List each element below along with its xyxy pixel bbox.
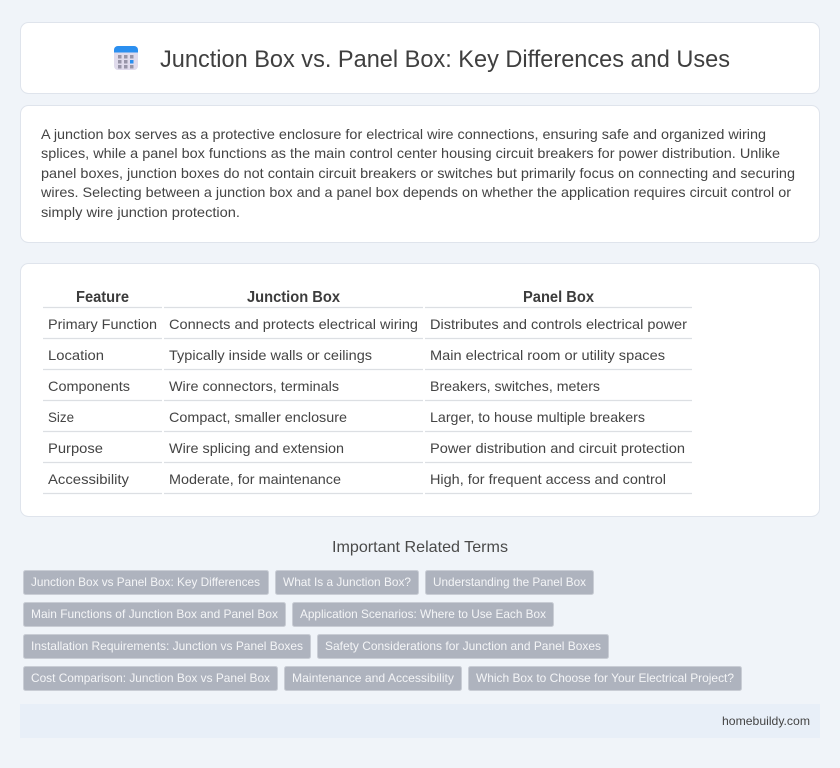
related term tags: What Is a Junction Box? [283, 575, 411, 589]
heading: important related terms: Important Related Terms [332, 539, 508, 556]
table rows: Distributes and controls electrical power [430, 316, 687, 332]
related term tags: Installation Requirements: Junction vs Panel Boxes [31, 639, 303, 653]
table rows: Breakers, switches, meters [430, 378, 600, 394]
footer [20, 704, 820, 738]
table rows: Purpose [48, 440, 103, 456]
panel: introduction text: A junction box serves as a protective enclosure for electrical wire connections, ensuring safe and organized wiring [41, 126, 766, 142]
table rows: Moderate, for maintenance [169, 471, 341, 487]
table header: Panel Box [523, 289, 594, 306]
table rows: High, for frequent access and control [430, 471, 666, 487]
panel: introduction text: splices, while a panel box functions as the main control center housing circuit breakers for power distribution. Unlike [41, 145, 780, 161]
related term tags: Application Scenarios: Where to Use Each Box [300, 607, 546, 621]
related term tags: Understanding the Panel Box [433, 575, 586, 589]
table rows: Components [48, 378, 130, 394]
related term tags: Cost Comparison: Junction Box vs Panel Box [31, 671, 270, 685]
panel: introduction text [20, 106, 820, 242]
panel: introduction text: wires. Selecting between a junction box and a panel box depends on whether the application requires circuit control or [40, 184, 791, 200]
related term tags: Safety Considerations for Junction and Panel Boxes [325, 639, 601, 653]
related term tags: Which Box to Choose for Your Electrical Project? [476, 671, 734, 685]
table rows [43, 308, 692, 494]
table rows: Wire connectors, terminals [169, 378, 339, 394]
panel: comparison table [20, 264, 820, 516]
table rows: Main electrical room or utility spaces [430, 347, 665, 363]
icon: calendar grid [114, 46, 138, 70]
table rows: Typically inside walls or ceilings [169, 347, 372, 363]
table header [76, 289, 594, 306]
table rows: Connects and protects electrical wiring [169, 316, 418, 332]
panel: introduction text: panel boxes, junction boxes do not contain circuit breakers or switches but primarily focus on connecting and securing [41, 165, 795, 181]
table rows: Location [48, 347, 104, 363]
table rows: Size [48, 409, 74, 425]
related term tags [24, 570, 742, 690]
related term tags: Main Functions of Junction Box and Panel Box [31, 607, 278, 621]
title: Junction Box vs. Panel Box: Key Differences and Uses [160, 46, 730, 73]
table rows: Compact, smaller enclosure [169, 409, 347, 425]
panel: title header [20, 22, 820, 94]
table header: Feature [76, 289, 129, 306]
panel: introduction text: simply wire junction protection. [41, 204, 240, 220]
table header: Junction Box [247, 289, 340, 306]
table rows: Accessibility [48, 471, 129, 487]
table rows: Primary Function [48, 316, 157, 332]
related term tags: Maintenance and Accessibility [292, 671, 454, 685]
table rows: Power distribution and circuit protection [430, 440, 685, 456]
footer: homebuildy.com [722, 714, 810, 728]
related term tags: Junction Box vs Panel Box: Key Differences [31, 575, 260, 589]
table rows: Wire splicing and extension [169, 440, 344, 456]
table rows: Larger, to house multiple breakers [430, 409, 645, 425]
